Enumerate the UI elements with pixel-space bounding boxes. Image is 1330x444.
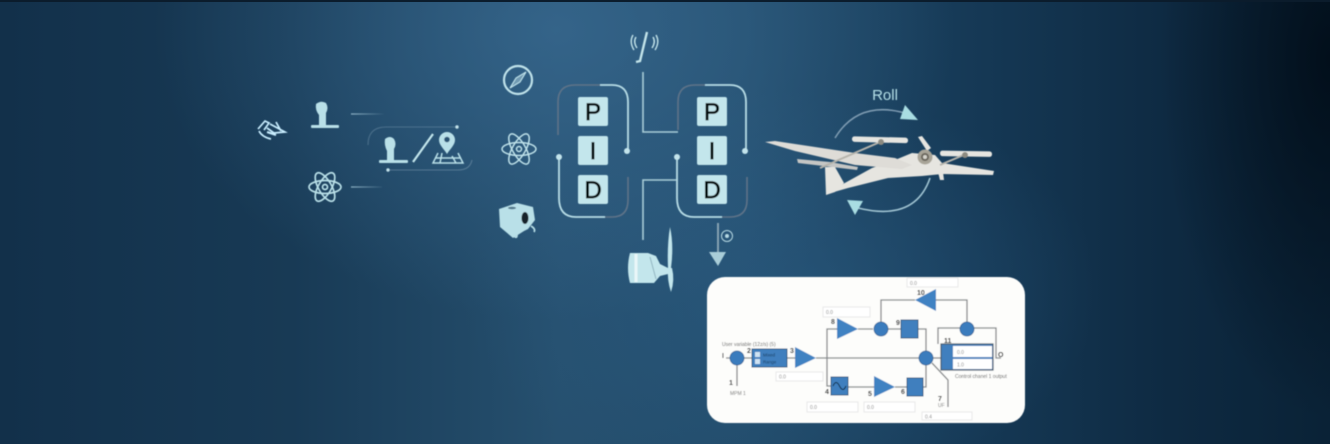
summing junctions xyxy=(730,322,974,365)
aircraft xyxy=(765,136,994,195)
propeller xyxy=(918,136,931,151)
connector: antenna to PID xyxy=(643,72,678,132)
engine xyxy=(918,150,932,164)
diagram labels: User variable (12z/s) (5) xyxy=(722,342,776,348)
panel: PID controller right xyxy=(674,85,748,217)
panel: control block diagram: 10 xyxy=(917,290,925,297)
sine wave xyxy=(833,382,846,390)
output block xyxy=(941,344,993,370)
icon: out-of-plane marker xyxy=(722,230,732,242)
panel: control block diagram: 8 xyxy=(831,319,835,326)
panel: control block diagram: 2 xyxy=(747,348,751,355)
panel: control block diagram: 9 xyxy=(896,320,900,327)
rotor boom 1 xyxy=(820,142,880,168)
label: Roll: Roll xyxy=(872,87,898,104)
panel: control block diagram: 0.0 xyxy=(867,405,874,411)
D block: D xyxy=(703,177,721,204)
P block: P xyxy=(585,99,601,126)
function blocks xyxy=(752,320,923,396)
output block: 0.0 xyxy=(957,350,964,356)
input section: mini aircraft icon xyxy=(258,121,285,139)
D block: D xyxy=(584,177,602,204)
panel: control block diagram: 0.0 xyxy=(779,374,786,380)
gain triangles xyxy=(795,289,936,397)
parameter fields xyxy=(776,278,972,420)
feedback bracket bottom xyxy=(677,157,747,217)
diagram labels: Control chanel 1 output xyxy=(955,374,1007,380)
diagram labels: UF xyxy=(938,403,945,409)
panel: control block diagram: 5 xyxy=(868,391,872,398)
icon: atom centre xyxy=(502,131,536,167)
feedback bracket top xyxy=(678,85,746,151)
I block: I xyxy=(590,138,596,165)
P block: P xyxy=(704,99,720,126)
icon: map pin xyxy=(433,132,463,163)
mode selector entries: Mixed xyxy=(763,352,776,358)
feedback bracket top xyxy=(558,85,628,151)
slash divider xyxy=(413,134,433,162)
rotor blade 1 xyxy=(852,136,908,143)
panel: control block diagram: 0.0 xyxy=(910,281,917,287)
panel: control block diagram: 7 xyxy=(938,396,942,403)
mode selector entries: Range xyxy=(763,360,777,364)
panel: PID controller left xyxy=(556,85,630,217)
panel: control block diagram: 0.0 xyxy=(826,310,833,316)
connector: joystick to selector xyxy=(351,113,384,115)
icon: motor and propeller xyxy=(628,227,673,292)
icon: compass xyxy=(504,66,532,94)
panel: control block diagram: 0.0 xyxy=(810,405,817,411)
panel: control block diagram: 3 xyxy=(790,348,794,355)
arrow: roll bottom xyxy=(847,178,930,215)
I block: I xyxy=(709,138,715,165)
tail xyxy=(825,167,844,195)
panel: control block diagram: 1 xyxy=(729,380,733,387)
mode selector entries xyxy=(755,352,777,364)
icon: joystick xyxy=(311,102,339,128)
far wing xyxy=(797,159,858,170)
icon: servo sensor xyxy=(499,203,535,238)
rotor blade 2 xyxy=(940,151,992,157)
panel: control block diagram: 6 xyxy=(901,389,905,396)
arrow: roll top xyxy=(835,105,918,138)
panel: control block diagram: 11 xyxy=(944,338,952,345)
panel: control block diagram: I xyxy=(722,353,724,360)
selector frame xyxy=(368,125,472,172)
arrow down to diagram xyxy=(709,223,726,266)
feedback bracket bottom xyxy=(559,157,628,217)
icon: joystick selector xyxy=(379,137,408,163)
connector: atom to selector xyxy=(351,186,382,188)
fuselage xyxy=(827,153,994,194)
panel: control block diagram xyxy=(707,277,1025,423)
connector: PID to motor xyxy=(643,180,678,240)
diagram labels xyxy=(722,342,1007,409)
signal lines xyxy=(726,300,1001,407)
icon: antenna xyxy=(631,32,658,62)
output block: 1.0 xyxy=(957,362,964,368)
panel: control block diagram: O xyxy=(998,352,1004,359)
main wing xyxy=(765,141,912,169)
icon: atom left xyxy=(309,170,341,204)
diagram labels: MPM 1 xyxy=(730,391,746,397)
panel: control block diagram: 4 xyxy=(825,389,829,396)
panel: control block diagram: 0.4 xyxy=(925,414,932,420)
